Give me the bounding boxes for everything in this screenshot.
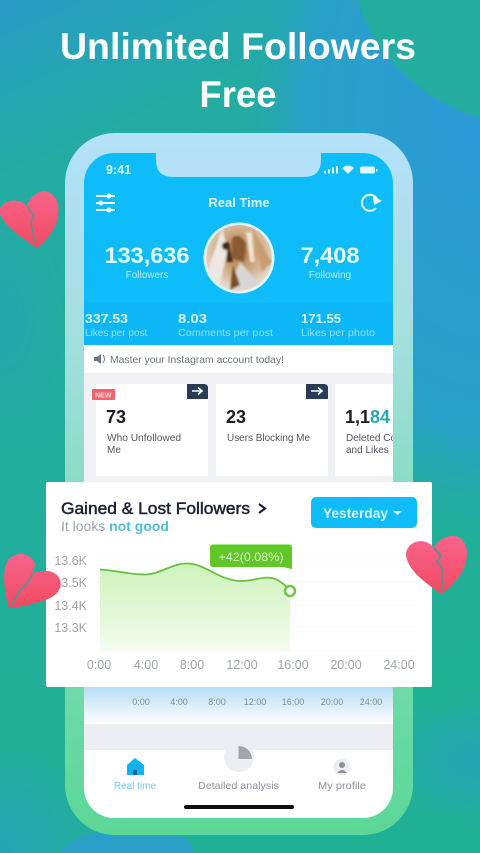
tooltip: +42(0.08%) — [218, 550, 284, 564]
yesterday dropdown — [311, 497, 417, 528]
x axis labels: 24:00 — [383, 658, 415, 672]
home indicator — [184, 805, 294, 809]
phone mockup — [65, 133, 413, 835]
tooltip — [210, 544, 292, 569]
chart card — [46, 482, 432, 687]
blue header — [84, 153, 393, 303]
likes per post: Likes per post — [85, 328, 147, 339]
lower chart remainder: 0:00 — [132, 697, 150, 707]
card: deleted comments — [335, 384, 396, 476]
card: deleted comments: 1,184 — [345, 407, 390, 427]
comments per post — [178, 314, 273, 338]
card: deleted comments: and Likes — [346, 445, 389, 456]
following stat: Following — [309, 270, 351, 281]
end marker — [285, 586, 295, 596]
cards area — [84, 373, 396, 483]
followers stat: Followers — [126, 270, 168, 281]
phone frame — [65, 133, 413, 835]
screen heading: Real Time — [208, 195, 270, 210]
x axis labels — [87, 658, 415, 672]
x axis labels: 8:00 — [180, 658, 204, 672]
comments per post: 8.03 — [178, 311, 207, 326]
tab: my profile: My profile — [318, 780, 366, 792]
line chart — [54, 544, 416, 672]
yesterday dropdown: Yesterday — [323, 505, 388, 521]
x axis labels: 12:00 — [226, 658, 258, 672]
followers stat: 133,636 — [104, 243, 190, 268]
following stat — [302, 248, 359, 280]
likes per photo: 171.55 — [301, 311, 341, 326]
tab: detailed analysis: Detailed analysis — [198, 780, 279, 792]
card: users blocking: Users Blocking Me — [227, 433, 310, 444]
avatar — [204, 222, 274, 294]
likes per post — [85, 314, 148, 338]
phone screen — [84, 150, 396, 818]
lower chart remainder: 24:00 — [360, 697, 382, 707]
lower chart remainder — [84, 687, 393, 720]
refresh icon — [362, 195, 382, 211]
icon: broken heart left — [4, 554, 61, 608]
card: users blocking: 23 — [226, 407, 246, 427]
notch — [156, 153, 321, 177]
x axis labels: 20:00 — [330, 658, 362, 672]
icon: broken heart right — [406, 536, 467, 594]
tab: real time: Real time — [114, 781, 157, 792]
card: deleted comments: Deleted Co — [346, 433, 396, 444]
new badge: NEW — [95, 392, 112, 400]
y axis labels — [54, 554, 88, 635]
icon: broken heart top left — [0, 191, 58, 248]
lower chart remainder: 12:00 — [244, 697, 266, 707]
chart subtitle: It looks not good — [61, 519, 169, 534]
card: users blocking — [216, 384, 328, 476]
x axis labels: 16:00 — [277, 658, 309, 672]
tab: detailed analysis — [198, 746, 279, 791]
y axis labels: 13.3K — [54, 621, 88, 635]
area fill — [100, 564, 290, 651]
chart title: Gained & Lost Followers — [61, 499, 250, 518]
lower chart remainder: 4:00 — [170, 697, 188, 707]
grey band — [84, 724, 393, 750]
card: who unfollowed: 73 — [106, 407, 126, 427]
chevron — [259, 504, 265, 513]
likes per photo — [302, 314, 375, 338]
lower chart remainder: 8:00 — [208, 697, 226, 707]
likes per post: 337.53 — [85, 311, 128, 326]
status icons — [324, 166, 378, 174]
y axis labels: 13.4K — [54, 599, 88, 613]
tab: my profile — [318, 758, 366, 792]
card: who unfollowed: Me — [107, 445, 121, 456]
trend line — [100, 564, 290, 591]
title: Free — [200, 74, 276, 115]
likes per photo: Likes per photo — [301, 328, 375, 339]
card: who unfollowed: Who Unfollowed — [107, 433, 181, 444]
comments per post: Comments per post — [178, 328, 273, 339]
card: who unfollowed — [96, 384, 208, 476]
announcement bar: Master your Instagram account today! — [110, 355, 284, 366]
tab: real time — [114, 758, 156, 789]
x axis labels: 4:00 — [134, 658, 158, 672]
following stat: 7,408 — [300, 243, 360, 268]
bottom navigation — [114, 742, 366, 809]
title: Unlimited Followers — [60, 26, 416, 67]
new badge — [92, 389, 115, 400]
title — [60, 26, 416, 115]
followers stat — [106, 248, 189, 278]
status time: 9:41 — [106, 163, 131, 177]
y axis labels: 13.5K — [54, 576, 88, 590]
x axis labels: 0:00 — [87, 658, 111, 672]
lower chart remainder: 16:00 — [282, 697, 304, 707]
menu icon — [96, 194, 115, 212]
y axis labels: 13.6K — [54, 554, 88, 568]
lower chart remainder: 20:00 — [321, 697, 343, 707]
